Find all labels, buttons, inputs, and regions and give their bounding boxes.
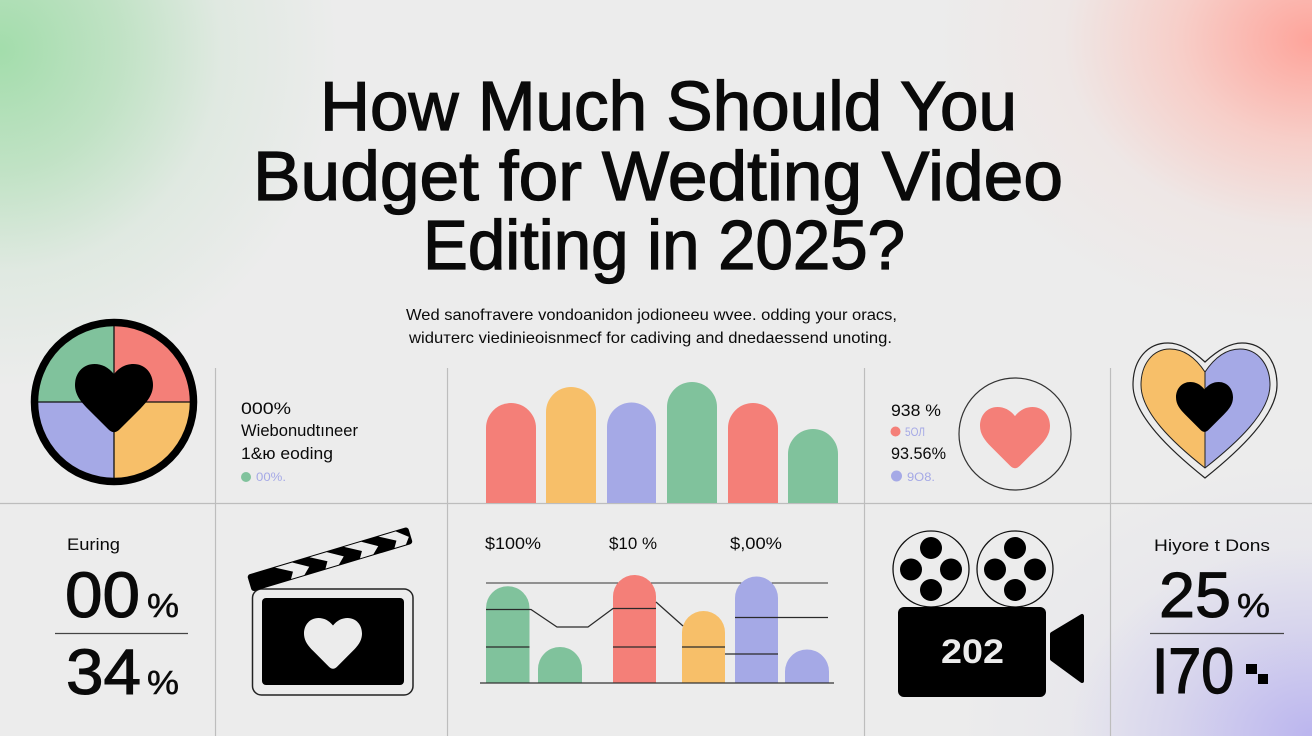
text block: top right stats: 93.56% bbox=[891, 445, 946, 463]
text block: top right stats: 9O8. bbox=[907, 470, 935, 484]
stat: bottom left: % bbox=[147, 587, 179, 624]
text block: top left stats bbox=[241, 400, 358, 484]
stat: bottom right: I70 bbox=[1152, 635, 1234, 707]
stat: bottom left: Euring bbox=[67, 535, 120, 554]
title: How Much Should You bbox=[320, 67, 1017, 145]
stat: bottom left: 34 bbox=[66, 636, 141, 708]
stat: bottom right: % bbox=[1237, 587, 1270, 624]
text block: top left stats: 00%. bbox=[256, 470, 286, 484]
title: Editing in 2025? bbox=[423, 206, 905, 284]
bar chart: bottom with trend lines: $100% bbox=[485, 535, 541, 553]
bar chart: bottom with trend lines: $,00% bbox=[730, 535, 782, 553]
subtitle text: Wed sanofтavere vondoanidon jodioneeu wvee. odding your oracs, bbox=[406, 307, 897, 324]
text block: top right stats: 5OЛ bbox=[905, 425, 925, 439]
text block: top left stats: Wiebonudtıneer bbox=[241, 422, 358, 440]
stat: bottom left: % bbox=[147, 664, 179, 701]
title: Budget for Wedting Video bbox=[253, 137, 1063, 215]
stat: bottom left bbox=[55, 535, 188, 708]
icon: film camera with reels bbox=[893, 531, 1082, 697]
bar chart: bottom with trend lines bbox=[480, 535, 834, 683]
stat: bottom right bbox=[1150, 536, 1284, 707]
text block: top left stats: 000% bbox=[241, 400, 291, 418]
stat: bottom right: Hiyore t Dons bbox=[1154, 536, 1270, 555]
bar chart: bottom with trend lines: $10 % bbox=[609, 535, 657, 553]
subtitle text bbox=[406, 307, 897, 347]
icon: film camera with reels: 202 bbox=[941, 633, 1004, 671]
title bbox=[253, 67, 1063, 284]
text block: top left stats: 1&ю eoding bbox=[241, 445, 333, 463]
bar chart: top bbox=[486, 382, 838, 503]
icon: quartered circle with heart bbox=[34, 322, 194, 482]
stat: bottom right: 25 bbox=[1159, 559, 1231, 631]
text block: top right stats: 938 % bbox=[891, 402, 941, 420]
icon: clapperboard with heart bbox=[247, 527, 413, 695]
subtitle text: widuтerc viedinieoisnmecf for cadiving and dnedaessend unoting. bbox=[408, 330, 892, 347]
stat: bottom left: 00 bbox=[65, 559, 140, 631]
text block: top right stats bbox=[890, 402, 946, 484]
icon: red heart in circle bbox=[959, 378, 1071, 490]
icon: two-tone outlined heart bbox=[1133, 343, 1277, 478]
